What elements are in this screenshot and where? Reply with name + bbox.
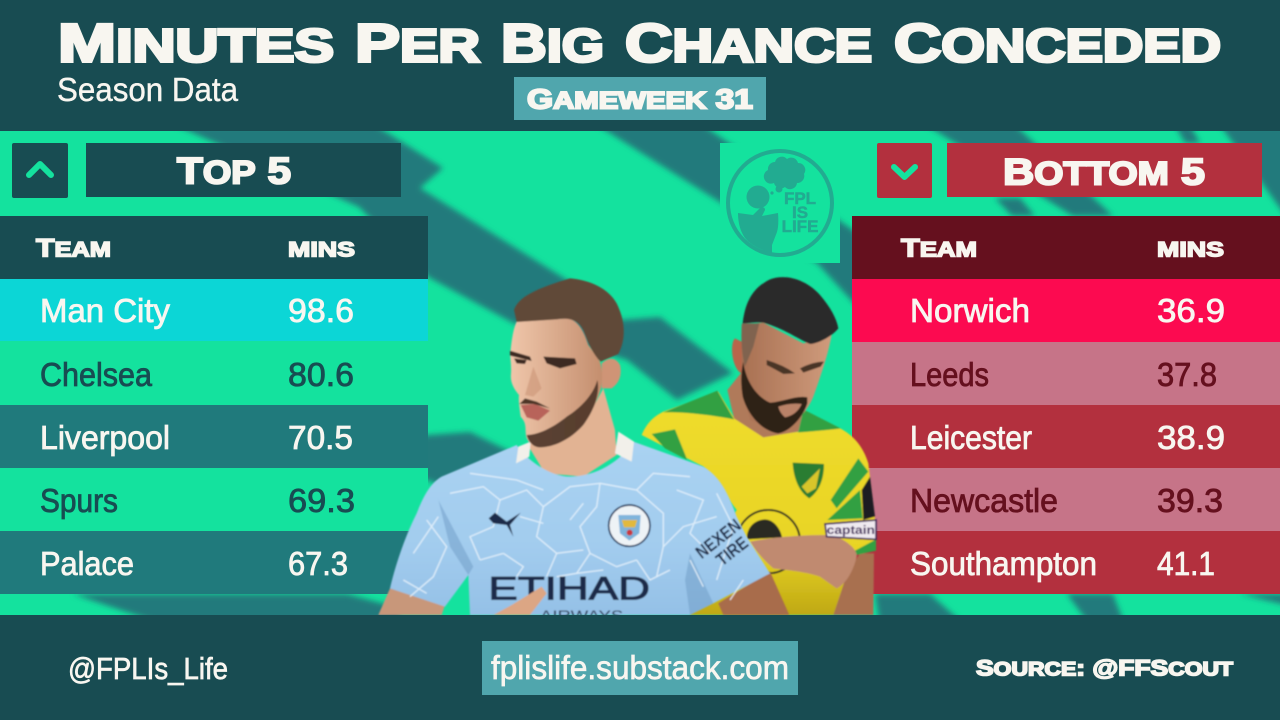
row: Chelsea: Chelsea [40,356,153,393]
heading: bottom 5 [947,143,1262,197]
heading: bottom 5: BOTTOM 5 [1003,152,1205,192]
row: Chelsea [0,341,428,405]
row: Man City: 98.6 [288,292,354,329]
row: Norwich [852,279,1280,342]
background diagonal stripes [73,125,1280,625]
hair fade [741,323,759,367]
heading: top 5 [86,143,401,197]
table header row: MINS [288,238,355,262]
icon: up chevron [12,143,68,198]
row: Spurs: 69.3 [288,482,355,519]
gameweek badge: GAMEWEEK 31 [527,84,753,114]
sleeve sponsor: Nexen Tire: NEXEN [692,515,745,563]
table: top 5 [0,216,428,594]
green background panel [0,131,1280,615]
mouth [521,404,550,421]
row: Norwich: 36.9 [1157,292,1225,329]
logo: FPL is Life [720,143,840,263]
logo: FPL is Life: LIFE [782,217,818,236]
row: Liverpool: Liverpool [40,419,170,456]
row: Southampton [852,531,1280,594]
row: Palace: Palace [40,545,134,582]
title: BIG [501,14,604,74]
footer: source credit: SOURCE : @FFS COUT [976,656,1233,680]
ear [602,359,621,388]
row: Palace: 67.3 [288,545,348,582]
right arm [718,572,789,615]
row: Norwich: Norwich [910,292,1030,329]
row: Leeds [852,342,1280,405]
photo: Man City player [378,278,789,625]
hand [493,587,547,615]
face [742,323,832,433]
moustache [519,398,550,408]
sleeve sponsor: Nexen Tire: TIRE [712,533,752,570]
yellow shirt [642,392,876,615]
panel: top 5 heading [12,143,401,198]
beard [527,380,598,447]
row: Newcastle: Newcastle [910,482,1058,519]
footer: twitter handle: @FPLIs_Life [68,651,228,686]
footer: substack link [482,641,798,695]
beard [741,362,807,433]
ear [732,338,745,374]
brows and eyes [767,360,824,374]
gameweek badge [514,77,766,120]
row: Newcastle: 39.3 [1157,482,1223,519]
row: Leeds: 37.8 [1157,356,1217,393]
row: Southampton: Southampton [910,545,1097,582]
row: Southampton: 41.1 [1157,545,1215,582]
puma logo [489,513,521,537]
sponsor: Etihad: ETIHAD [488,570,650,606]
captain armband [825,520,876,539]
collar [516,432,634,463]
sponsor badge [737,510,800,573]
row: Liverpool: 70.5 [288,419,353,456]
row: Leicester [852,405,1280,468]
row: Leeds: Leeds [910,356,989,393]
row: Spurs [0,468,428,531]
crest [793,463,824,498]
row: Chelsea: 80.6 [288,356,354,393]
row: Spurs: Spurs [40,482,118,519]
green shoulders and sleeve trim [652,391,876,555]
shirt shadow folds [438,500,713,615]
row: Leicester: Leicester [910,419,1032,456]
row: Newcastle [852,468,1280,531]
club crest [609,505,650,546]
forearm [830,553,874,615]
brows and eyes [510,351,577,368]
table: bottom 5 [852,216,1280,594]
heading: top 5: TOP 5 [177,150,291,192]
logo: FPL is Life: IS [792,203,808,222]
table header row [852,216,1280,279]
sponsor: Airways: AIRWAYS [540,609,624,625]
icon: down chevron [877,143,932,198]
left arm [378,588,445,615]
lower lip skin [778,404,802,417]
footer: substack link: fplislife.substack.com [491,649,789,686]
title: PER [355,14,480,74]
photo: Norwich player [642,277,876,615]
hair [514,278,624,362]
hair [743,277,838,344]
subtitle: Season Data [57,71,239,108]
table header row: TEAM [901,234,977,262]
footer band [0,615,1280,720]
row: Liverpool [0,405,428,468]
nose shadow [525,367,542,397]
logo: FPL is Life: FPL [784,189,816,208]
neck [727,370,803,437]
title: M INUTES [58,14,334,74]
row: Man City [0,279,428,341]
table header row [0,216,428,279]
neck [527,388,617,477]
title: CONCEDED [894,14,1221,74]
sleeve patch [862,477,875,520]
row: Leicester: 38.9 [1157,419,1225,456]
sleeve sponsor: Nexen Tire [692,515,756,577]
table header row: TEAM [36,234,111,262]
header band [0,0,1280,131]
row: Man City: Man City [40,292,170,329]
table header row: MINS [1157,238,1224,262]
arm across body [750,535,857,588]
sky blue shirt [390,442,770,615]
shirt crack pattern [403,473,743,600]
title: CHANCE [625,14,872,74]
title [58,14,1221,74]
row: Palace [0,531,428,594]
panel: bottom 5 heading [877,143,1262,198]
captain armband: captain [827,523,875,537]
face [510,318,602,447]
